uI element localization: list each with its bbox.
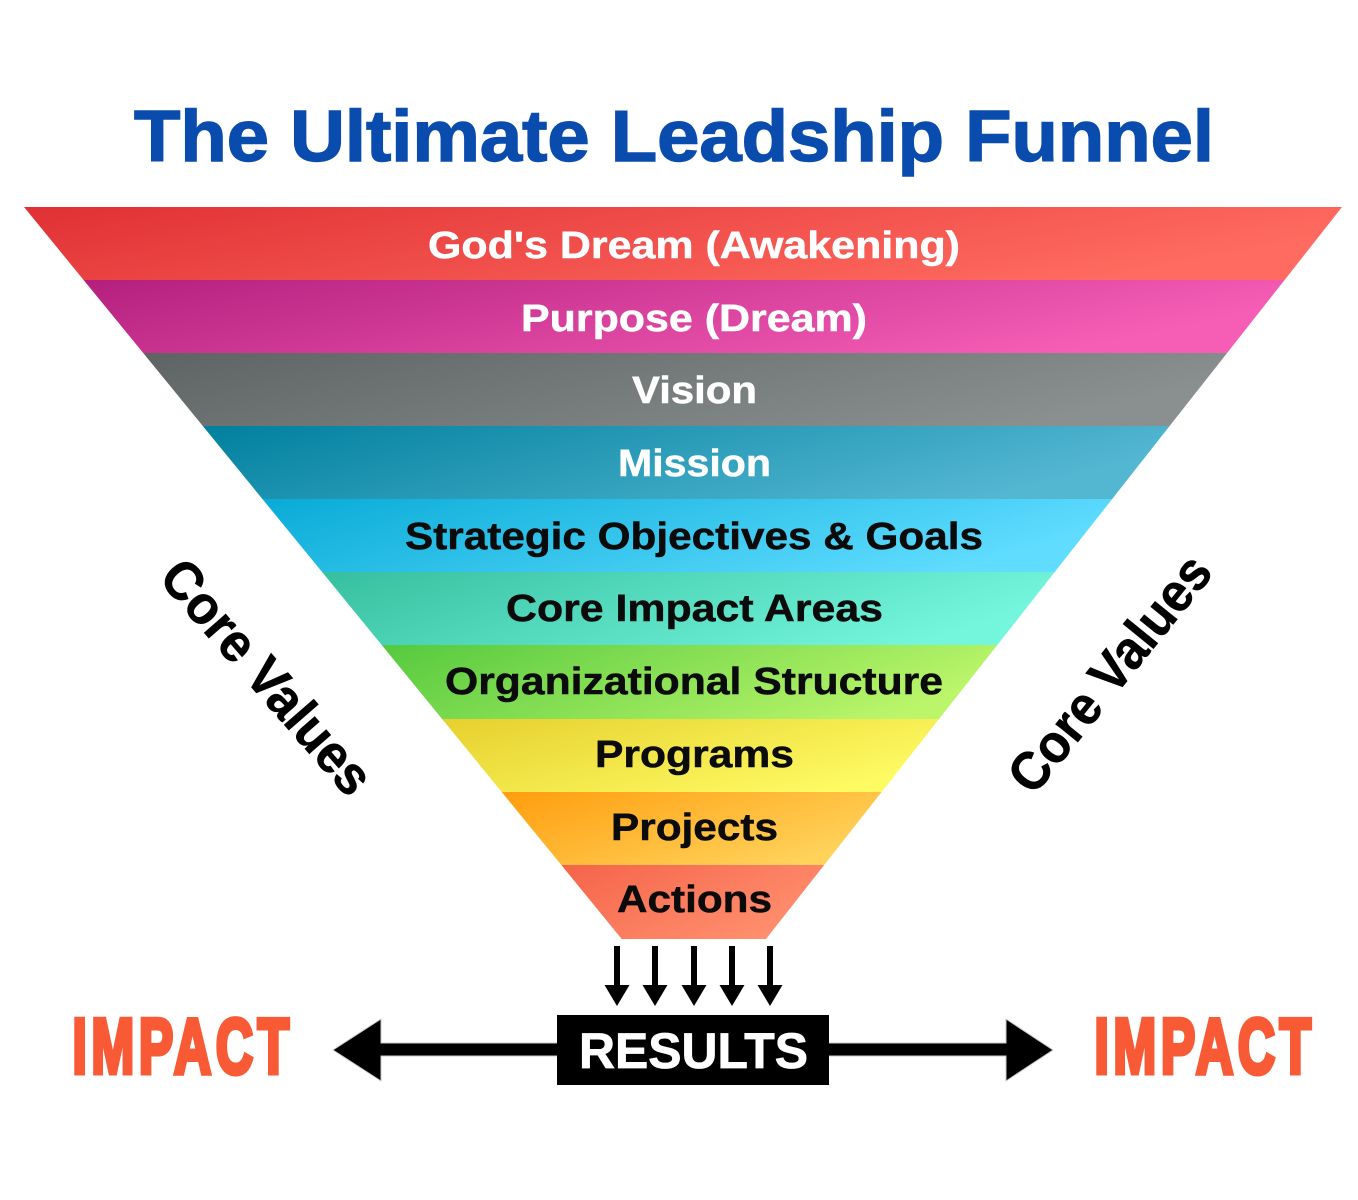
funnel band: Core Impact Areas: Core Impact Areas [506,588,883,630]
funnel band: Strategic Objectives & Goals [262,499,1112,572]
right IMPACT label: IMPACT [1094,1003,1316,1091]
funnel band: God's Dream (Awakening): God's Dream (Awakening) [428,225,960,267]
funnel band: Vision: Vision [632,370,757,412]
funnel band: Programs [442,719,939,792]
funnel band: Actions: Actions [617,879,772,921]
funnel band: Projects: Projects [611,807,778,849]
funnel band: God's Dream (Awakening) [24,207,1342,280]
left rotated label: Core Values: Core Values [148,547,385,807]
left IMPACT label: IMPACT [72,1003,294,1091]
funnel band: Purpose (Dream) [84,280,1285,353]
funnel band: Organizational Structure [382,645,997,719]
funnel [24,207,1342,939]
funnel band: Purpose (Dream): Purpose (Dream) [521,298,867,340]
results box [557,1015,829,1085]
funnel band: Strategic Objectives & Goals: Strategic Objectives & Goals [405,516,983,558]
funnel band: Mission [203,426,1170,499]
right rotated label: Core Values: Core Values [996,543,1224,804]
funnel band: Projects [502,792,882,865]
funnel band: Core Impact Areas [322,572,1055,645]
results box: RESULTS [579,1023,808,1079]
funnel band: Organizational Structure: Organizational Structure [445,661,943,703]
title: The Ultimate Leadship Funnel [134,97,1214,177]
funnel band: Programs: Programs [595,734,794,776]
funnel band: Vision [143,353,1227,426]
right arrow [826,1019,1053,1081]
funnel band: Actions [561,865,824,939]
funnel band: Mission: Mission [618,443,771,485]
left arrow [333,1019,560,1081]
five down arrows [604,946,782,1006]
